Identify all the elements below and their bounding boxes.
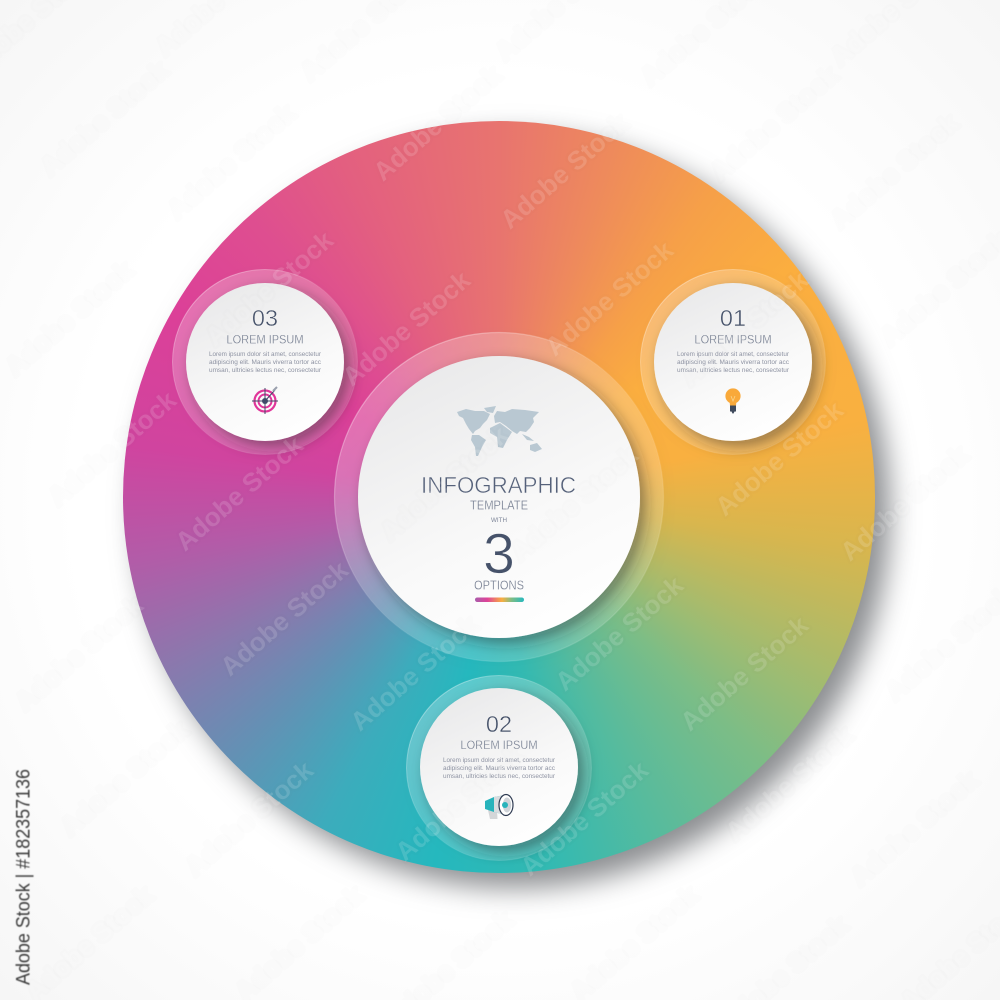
watermark: Adobe Stock xyxy=(539,234,679,362)
centre glass ring xyxy=(334,332,664,662)
watermark: Adobe Stock xyxy=(199,224,339,352)
body text 03: Lorem ipsum dolor sit amet, consectetur xyxy=(209,351,322,358)
watermark: Adobe Stock xyxy=(834,439,974,567)
body text 01 xyxy=(677,351,790,374)
circle 03 xyxy=(186,283,344,441)
body text 01: adipiscing elit. Mauris viverra tortor acc xyxy=(677,359,790,366)
watermark: Adobe Stock xyxy=(42,384,182,512)
number 01: 01 xyxy=(720,305,746,331)
watermark: Adobe Stock xyxy=(344,609,484,737)
body text 03: adipiscing elit. Mauris viverra tortor acc xyxy=(209,359,322,366)
heading 02: LOREM IPSUM xyxy=(460,738,538,752)
body text 03: umsan, ultricies lectus nec, consectetur xyxy=(209,367,322,374)
panel: option 03 xyxy=(172,270,358,454)
stock id caption: Adobe Stock | #182357136 xyxy=(14,769,34,985)
watermark: Adobe Stock xyxy=(169,429,309,557)
ring 02 xyxy=(406,676,592,860)
body text 02 xyxy=(443,757,556,780)
gradient bar xyxy=(475,598,524,602)
watermark: Adobe Stock xyxy=(374,419,514,547)
icon: target xyxy=(252,387,278,414)
watermark: Adobe Stock xyxy=(336,264,476,392)
title: infographic: INFOGRAPHIC xyxy=(421,472,576,498)
icon: light bulb xyxy=(725,388,741,414)
body text 03 xyxy=(209,351,322,374)
watermark: Adobe Stock xyxy=(719,719,859,847)
body text 02: Lorem ipsum dolor sit amet, consectetur xyxy=(443,757,556,764)
watermark: Adobe Stock xyxy=(367,59,507,187)
heading 03: LOREM IPSUM xyxy=(226,332,304,346)
label: options: OPTIONS xyxy=(474,578,524,592)
watermark: Adobe Stock xyxy=(34,54,174,182)
watermark: Adobe Stock xyxy=(9,589,149,717)
panel: option 01 xyxy=(640,270,826,454)
watermark: Adobe Stock xyxy=(389,739,529,867)
watermark: Adobe Stock xyxy=(824,107,964,235)
main disc shadow xyxy=(138,136,890,888)
watermark: Adobe Stock xyxy=(494,107,634,235)
body text 01: umsan, ultricies lectus nec, consectetur xyxy=(677,367,790,374)
circle 01 xyxy=(654,283,812,441)
watermark: Adobe Stock xyxy=(54,714,194,842)
watermark: Adobe Stock xyxy=(704,59,844,187)
ring 03 xyxy=(172,270,358,454)
icon: world map xyxy=(457,406,542,456)
watermark: Adobe Stock xyxy=(709,394,849,522)
watermark: Adobe Stock xyxy=(549,569,689,697)
heading 01: LOREM IPSUM xyxy=(694,332,772,346)
label: with: WITH xyxy=(491,518,507,524)
main colour wheel disc xyxy=(123,121,875,873)
number 03: 03 xyxy=(252,305,278,331)
watermark: Adobe Stock xyxy=(179,754,319,882)
watermark: Adobe Stock xyxy=(844,764,984,892)
body text 02: adipiscing elit. Mauris viverra tortor acc xyxy=(443,765,556,772)
circle 02 xyxy=(420,688,578,846)
watermark: Adobe Stock xyxy=(674,609,814,737)
number 02: 02 xyxy=(486,711,512,737)
watermark: Adobe Stock xyxy=(161,97,301,225)
subtitle: template: TEMPLATE xyxy=(470,498,528,512)
body text 02: umsan, ultricies lectus nec, consectetur xyxy=(443,773,556,780)
panel: centre circle xyxy=(334,332,664,662)
number 3: 3 xyxy=(483,522,515,586)
ring 01 xyxy=(640,270,826,454)
watermark: Adobe Stock xyxy=(504,439,644,567)
centre white circle xyxy=(358,356,640,638)
panel: option 02 xyxy=(406,676,592,860)
body text 01: Lorem ipsum dolor sit amet, consectetur xyxy=(677,351,790,358)
watermark: Adobe Stock xyxy=(514,754,654,882)
watermark: Adobe Stock xyxy=(214,554,354,682)
icon: megaphone xyxy=(485,794,513,819)
watermark: Adobe Stock xyxy=(674,264,814,392)
watermark: Adobe Stock xyxy=(0,254,139,382)
